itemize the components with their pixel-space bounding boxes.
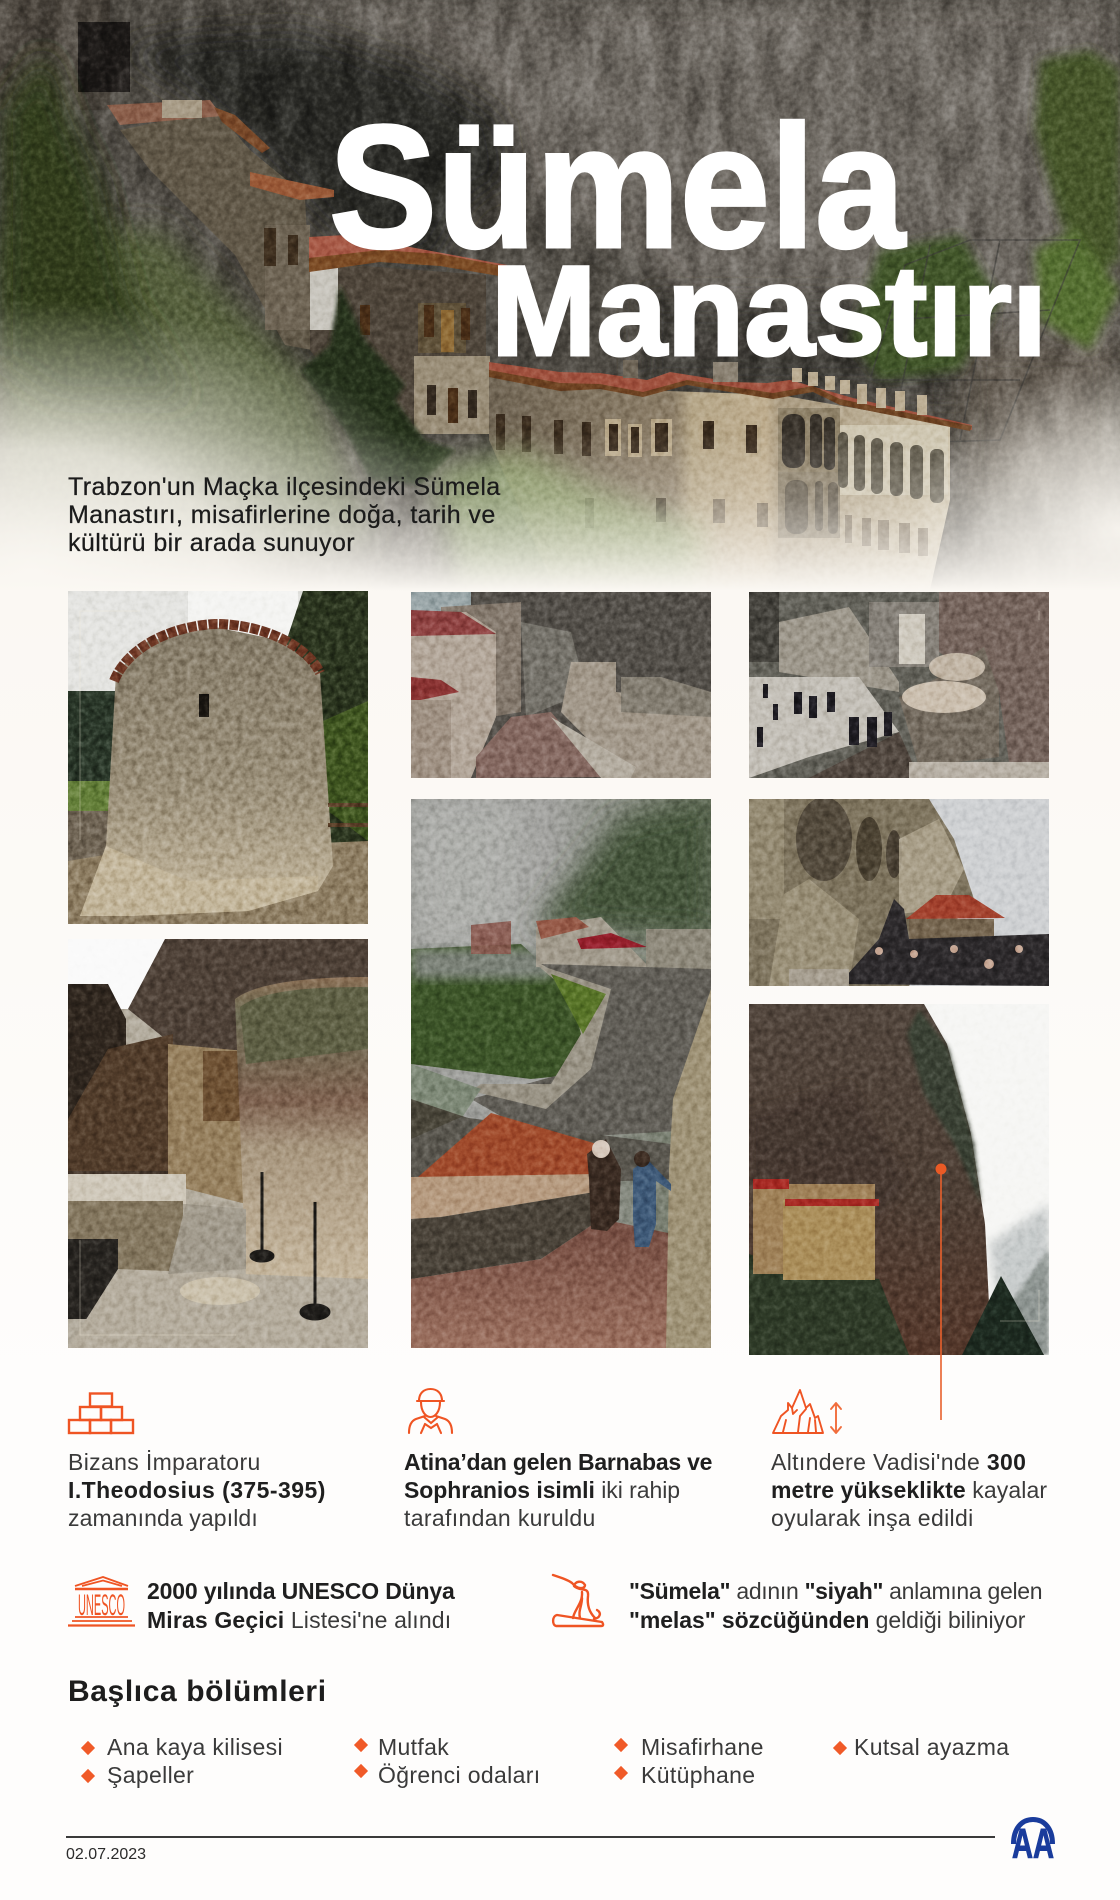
light green trees — [430, 450, 700, 600]
right arcade — [838, 432, 944, 503]
monastery block — [753, 1179, 879, 1280]
main long building — [489, 360, 972, 600]
text: Bizans: I.Theodosius (375-395) — [68, 1477, 326, 1503]
intro text: Manastırı, misafirlerine doğa, tarih ve — [68, 501, 496, 529]
text: Bizans: Bizans İmparatoru — [68, 1449, 261, 1475]
icon: bricks — [68, 1392, 134, 1434]
text: Bizans: zamanında yapıldı — [68, 1505, 258, 1531]
text: UNESCO listing — [147, 1578, 455, 1633]
footer rule — [66, 1836, 995, 1838]
mist over the valley — [0, 0, 1120, 840]
list: sections — [81, 1734, 1010, 1788]
photo: misty valley and stairs — [411, 799, 711, 1348]
icon: priest figure — [408, 1388, 454, 1434]
text: etymology — [629, 1578, 1042, 1633]
icon: burning log — [552, 1574, 604, 1628]
chimneys and merlons — [623, 360, 927, 415]
list: sections: Öğrenci odaları — [378, 1762, 540, 1788]
text: UNESCO listing: 2000 yılında UNESCO Dünya — [147, 1578, 455, 1604]
text: Barnabas: Atina’dan gelen Barnabas ve — [404, 1449, 712, 1475]
photo: monastery on the cliff face — [749, 1004, 1049, 1355]
icon: mountain with height arrow — [772, 1389, 842, 1434]
text: Barnabas: tarafından kuruldu — [404, 1505, 596, 1531]
right stone wall — [666, 989, 711, 1348]
left hillside and conifer — [0, 50, 370, 600]
safety net on the cliff — [850, 240, 1080, 445]
text: Barnabas: Sophranios isimli iki rahip — [404, 1477, 680, 1503]
list: sections: Ana kaya kilisesi — [107, 1734, 283, 1760]
heading: main sections: Başlıca bölümleri — [68, 1675, 327, 1708]
list: sections: Şapeller — [107, 1762, 194, 1788]
text: Altındere Vadisi: oyularak inşa edildi — [771, 1505, 974, 1531]
stacked loggias — [778, 408, 840, 538]
middle building — [309, 235, 507, 440]
text: etymology: "melas" sözcüğünden geldiği biliniyor — [629, 1607, 1025, 1633]
callout pin line — [936, 1164, 946, 1420]
photo: inner courtyard with visitors — [749, 592, 1049, 778]
photo: frescoed church wall — [68, 939, 368, 1348]
intro text: kültürü bir arada sunuyor — [68, 529, 355, 557]
photo: courtyard buildings — [411, 592, 711, 778]
text: Altındere Vadisi: Altındere Vadisi'nde 300 — [771, 1449, 1026, 1475]
text: etymology: "Sümela" adının "siyah" anlamına gelen — [629, 1578, 1042, 1604]
text: Altındere Vadisi: metre yükseklikte kayalar — [771, 1477, 1047, 1503]
visitors on stairs — [587, 1139, 671, 1247]
text: Bizans — [68, 1449, 326, 1531]
title — [329, 100, 1047, 370]
date: 02.07.2023 — [66, 1846, 146, 1863]
list: sections: Kütüphane — [641, 1762, 755, 1788]
pine in front of the building — [300, 285, 455, 485]
text: Altındere Vadisi — [771, 1449, 1047, 1531]
intro text: Trabzon'un Maçka ilçesindeki Sümela — [68, 473, 501, 501]
list: sections: Mutfak — [378, 1734, 449, 1760]
text: Barnabas — [404, 1449, 712, 1531]
photo: crowd under the arches — [749, 799, 1049, 986]
hero photo: Sümela monastery on the cliff — [0, 0, 1120, 586]
upper left building — [107, 100, 334, 350]
text: UNESCO listing: Miras Geçici Listesi'ne alındı — [147, 1607, 451, 1633]
icon: UNESCO temple — [68, 1576, 135, 1627]
right side greenery — [850, 50, 1120, 380]
photo: round stone tower — [68, 591, 368, 924]
list: sections: Misafirhane — [641, 1734, 764, 1760]
intro text — [68, 473, 501, 557]
list: sections: Kutsal ayazma — [854, 1734, 1009, 1760]
orange tiled roof — [418, 1113, 604, 1177]
